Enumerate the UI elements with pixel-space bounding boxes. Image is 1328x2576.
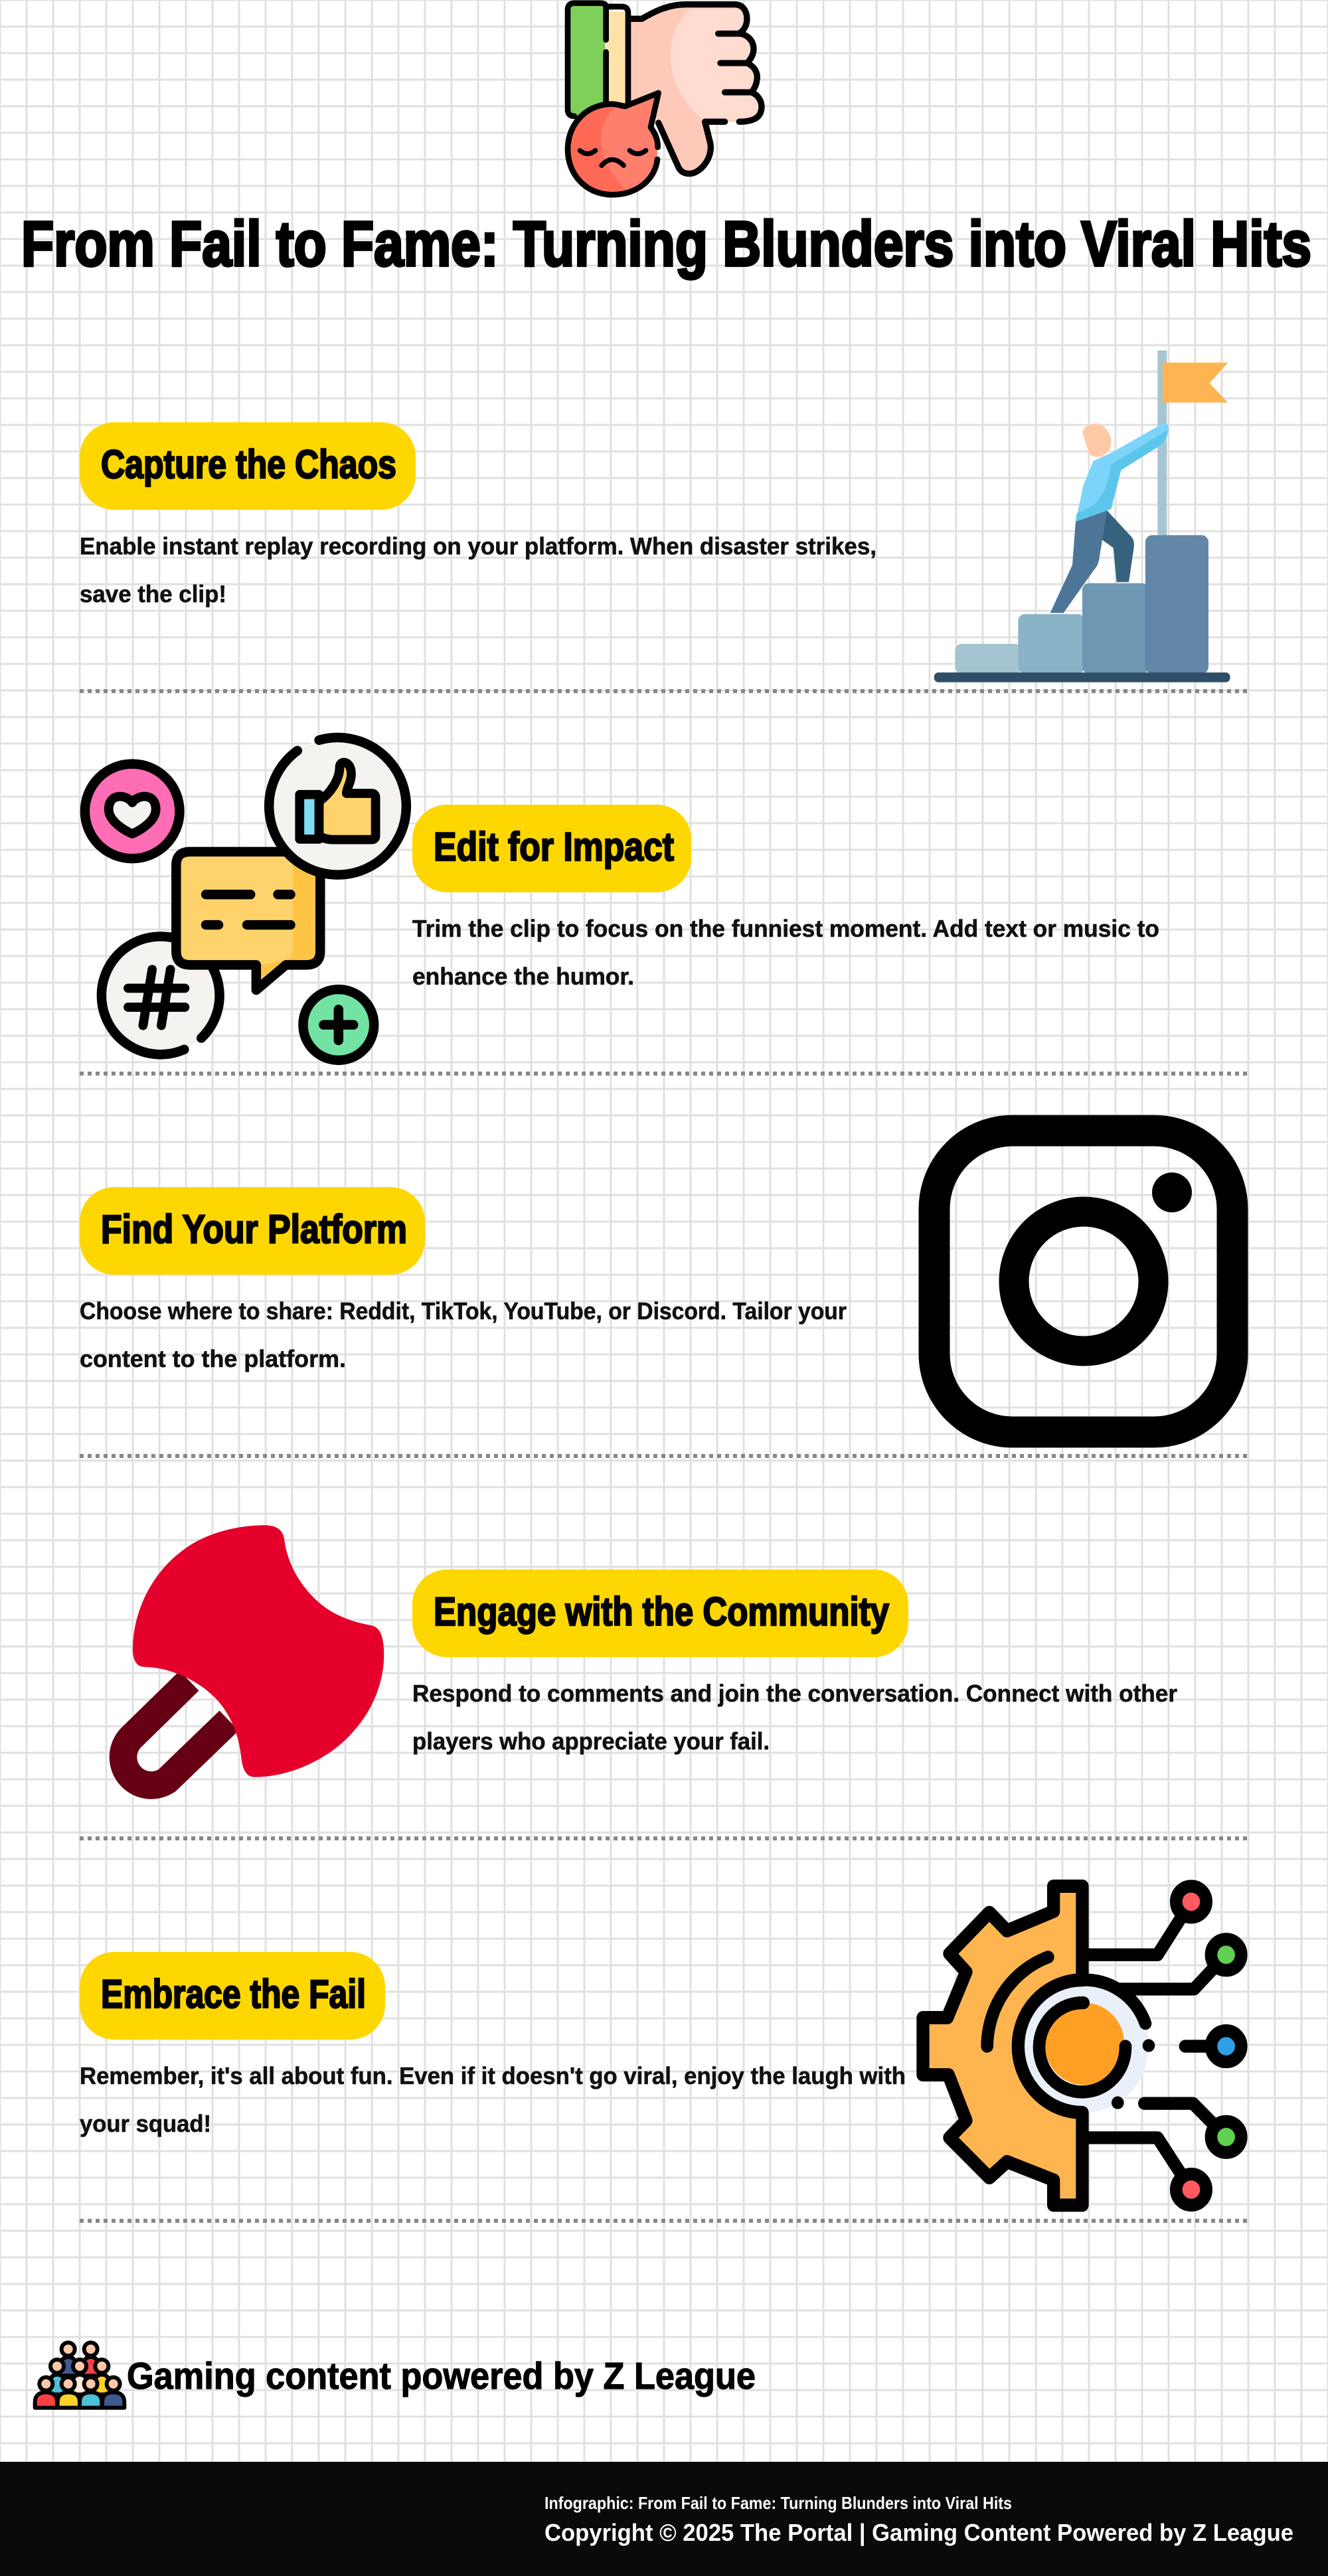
body text: content to the platform.	[80, 1345, 346, 1372]
body text: players who appreciate your fail.	[412, 1728, 770, 1755]
pill heading	[412, 805, 691, 892]
section 3: find your platform	[80, 1131, 1232, 1432]
footer bar	[0, 2462, 1328, 2576]
body text: save the clip!	[80, 580, 226, 607]
section 1: capture the chaos	[80, 351, 1230, 683]
powered by text: Gaming content powered by Z League	[127, 2355, 756, 2397]
section 4: engage with the community	[124, 1525, 1177, 1785]
pill heading: Edit for Impact	[434, 825, 674, 869]
footer copyright line: Copyright © 2025 The Portal | Gaming Content Powered by Z League	[544, 2519, 1293, 2547]
icon: red megaphone pin	[124, 1525, 384, 1785]
body text	[80, 532, 876, 607]
pill heading	[80, 1187, 425, 1275]
pill heading: Engage with the Community	[434, 1589, 890, 1634]
body text: Choose where to share: Reddit, TikTok, YouTube, or Discord. Tailor your	[80, 1297, 847, 1325]
body text: Respond to comments and join the conversation. Connect with other	[412, 1680, 1177, 1707]
body text: enhance the humor.	[412, 963, 634, 990]
body text: your squad!	[80, 2110, 211, 2137]
pill heading	[412, 1570, 908, 1657]
pill heading: Capture the Chaos	[101, 442, 396, 487]
body text	[80, 2062, 906, 2137]
pill heading	[80, 422, 416, 510]
body text	[412, 915, 1159, 990]
section 2: edit for impact	[85, 738, 1159, 1060]
powered by line	[35, 2342, 756, 2408]
icon: half gear with circuit nodes	[923, 1886, 1241, 2205]
icon: thumbs down with sad face	[568, 3, 762, 195]
icon: social media speech bubble cluster	[85, 738, 406, 1060]
icon: climber planting flag on bar steps	[934, 351, 1230, 683]
footer infographic line: Infographic: From Fail to Fame: Turning Blunders into Viral Hits	[544, 2493, 1012, 2513]
body text	[412, 1680, 1177, 1755]
icon: instagram camera	[934, 1131, 1232, 1432]
body text: Trim the clip to focus on the funniest moment. Add text or music to	[412, 915, 1159, 942]
pill heading	[80, 1952, 385, 2040]
pill heading: Embrace the Fail	[101, 1972, 366, 2016]
body text: Remember, it's all about fun. Even if it doesn't go viral, enjoy the laugh with	[80, 2062, 906, 2089]
pill heading: Find Your Platform	[101, 1207, 407, 1251]
body text	[80, 1297, 847, 1372]
section 5: embrace the fail	[80, 1886, 1241, 2205]
icon: crowd of people	[35, 2342, 124, 2408]
body text: Enable instant replay recording on your platform. When disaster strikes,	[80, 532, 876, 560]
